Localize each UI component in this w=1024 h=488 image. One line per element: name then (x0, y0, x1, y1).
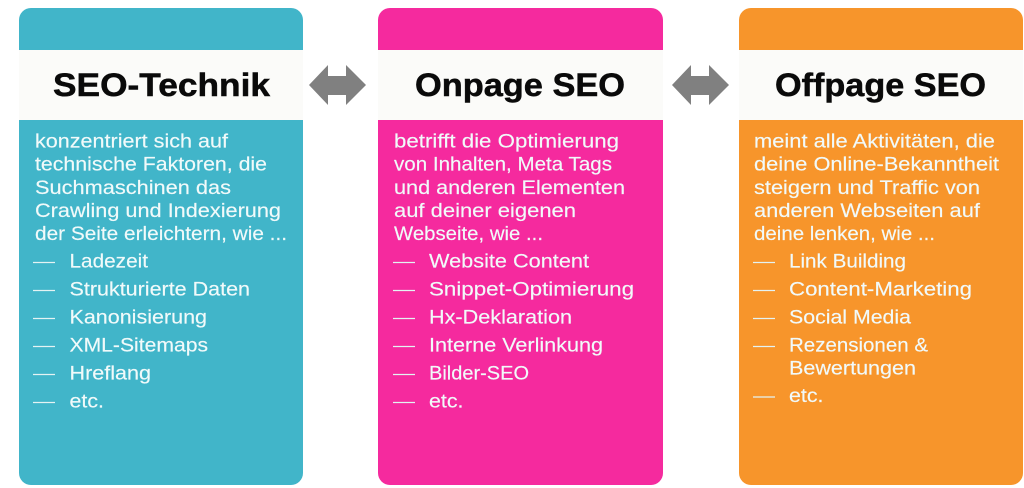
intro text: Onpage SEO: von Inhalten, Meta Tags (394, 154, 612, 176)
heading band: SEO-Technik: SEO-Technik (53, 67, 270, 103)
intro text: SEO-Technik: Crawling und Indexierung (35, 200, 281, 222)
list: SEO-Technik factors (33, 250, 250, 412)
list: SEO-Technik factors: Strukturierte Daten (70, 278, 250, 300)
intro text: SEO-Technik: Suchmaschinen das (35, 177, 231, 199)
intro text: Onpage SEO: auf deiner eigenen (394, 200, 576, 222)
list: Offpage SEO factors: Rezensionen & (789, 334, 928, 356)
intro text: Onpage SEO (394, 130, 625, 245)
list: Offpage SEO factors (753, 250, 972, 407)
list: Onpage SEO factors (393, 250, 634, 412)
intro text: Offpage SEO: meint alle Aktivitäten, die (754, 130, 995, 152)
intro text: Onpage SEO: und anderen Elementen (394, 177, 625, 199)
list: Onpage SEO factors: Snippet-Optimierung (429, 278, 634, 300)
intro text: Offpage SEO (754, 130, 1000, 245)
arrow: SEO-Technik to Onpage SEO (309, 65, 366, 105)
list: SEO-Technik factors: etc. (70, 390, 104, 412)
intro text: Offpage SEO: deine Online-Bekanntheit (754, 154, 1000, 176)
list: Onpage SEO factors: Interne Verlinkung (429, 334, 603, 356)
intro text: Offpage SEO: steigern und Traffic von (754, 177, 980, 199)
heading band: Onpage SEO (378, 50, 663, 120)
panel: SEO-Technik (19, 8, 303, 485)
list: Offpage SEO factors: Social Media (789, 306, 911, 328)
list: Onpage SEO factors: Bilder-SEO (429, 362, 529, 384)
list: Onpage SEO factors: Website Content (429, 250, 590, 272)
heading band: SEO-Technik (19, 50, 303, 120)
list: SEO-Technik factors: Ladezeit (70, 250, 149, 272)
heading band: Onpage SEO: Onpage SEO (415, 67, 625, 103)
heading band: Offpage SEO (739, 50, 1023, 120)
panel: Offpage SEO (739, 8, 1023, 485)
list: Offpage SEO factors: Link Building (789, 250, 906, 272)
intro text: SEO-Technik: technische Faktoren, die (35, 154, 267, 176)
list: Offpage SEO factors: Content-Marketing (789, 278, 972, 300)
intro text: Offpage SEO: anderen Webseiten auf (754, 200, 981, 222)
intro text: SEO-Technik: konzentriert sich auf (35, 130, 229, 152)
intro text: Onpage SEO: betrifft die Optimierung (394, 130, 619, 152)
heading band: Offpage SEO: Offpage SEO (775, 67, 986, 103)
intro text: Offpage SEO: deine lenken, wie ... (754, 223, 935, 245)
list: SEO-Technik factors: XML-Sitemaps (70, 334, 208, 356)
intro text: SEO-Technik: der Seite erleichtern, wie ... (35, 223, 287, 245)
list: SEO-Technik factors: Hreflang (70, 362, 151, 384)
intro text: Onpage SEO: Webseite, wie ... (394, 223, 543, 245)
intro text: SEO-Technik (35, 130, 287, 245)
panel: Onpage SEO (378, 8, 663, 485)
list: Onpage SEO factors: etc. (429, 390, 464, 412)
list: SEO-Technik factors: Kanonisierung (70, 306, 207, 328)
list: Offpage SEO factors: etc. (789, 385, 824, 407)
arrow: Onpage SEO to Offpage SEO (672, 65, 729, 105)
list: Onpage SEO factors: Hx-Deklaration (429, 306, 572, 328)
list: Offpage SEO factors: Bewertungen (789, 358, 916, 380)
